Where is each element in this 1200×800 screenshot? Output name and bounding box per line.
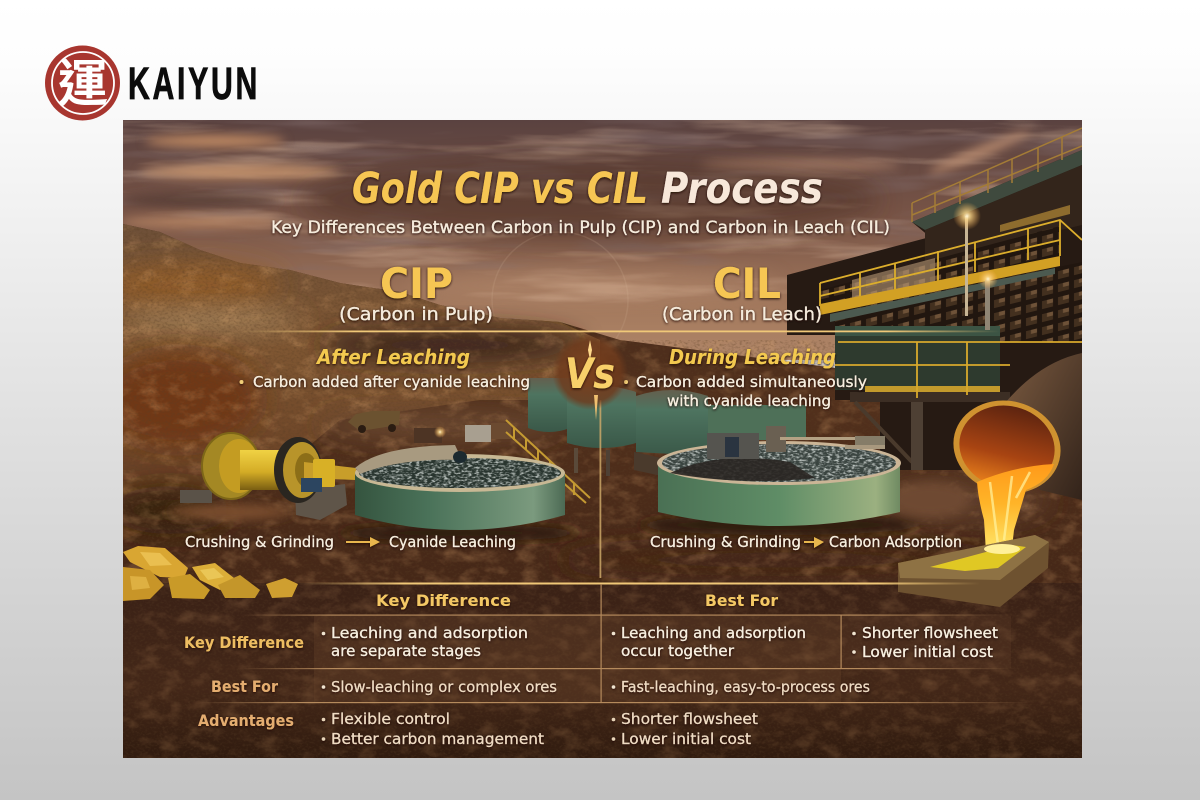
CIL column cells: occur together: [621, 642, 735, 660]
CIL process flow: [650, 533, 962, 551]
lower deck and railing: [865, 386, 1000, 392]
VS badge: [552, 334, 628, 420]
CIP process flow: Cyanide Leaching: [389, 533, 516, 551]
VS badge: Vs: [565, 349, 615, 398]
column headers: Best For: [705, 591, 778, 610]
walkway deck: [820, 256, 1060, 315]
row labels: Advantages: [198, 711, 294, 730]
upper railing: [912, 128, 1082, 222]
CIL description: with cyanide leaching: [667, 392, 831, 410]
windows: [820, 226, 1060, 308]
ladle and molten gold pour: [898, 353, 1082, 607]
tank: cyanide leaching: [355, 445, 565, 530]
ball mill: [180, 433, 356, 520]
CIP description: After Leaching: [315, 345, 470, 369]
CIL column cells: Lower initial cost: [862, 643, 993, 661]
heading: CIP: [339, 259, 493, 325]
walkway railing: [820, 220, 1082, 306]
CIP column cells: Better carbon management: [331, 730, 544, 748]
logo: Kaiyun: KAIYUN: [128, 58, 260, 109]
row labels: Best For: [211, 677, 278, 696]
CIP column cells: are separate stages: [331, 642, 481, 660]
subtitle: Key Differences Between Carbon in Pulp (CIP) and Carbon in Leach (CIL): [271, 218, 890, 238]
CIL process flow: Carbon Adsorption: [829, 533, 962, 551]
infographic image panel: [100, 120, 1082, 758]
heading: CIP: (Carbon in Pulp): [339, 304, 493, 325]
lamps: [965, 216, 968, 316]
column headers: [376, 591, 778, 610]
CIP column cells: Leaching and adsorption: [331, 624, 528, 642]
comparison table: [184, 591, 998, 748]
CIP process flow: Crushing & Grinding: [185, 533, 334, 551]
CIP column cells: Slow-leaching or complex ores: [331, 678, 557, 696]
refinery structure: [787, 128, 1082, 470]
yellow stairs: [506, 420, 590, 503]
sky with clouds: [120, 120, 1082, 368]
heading: CIP: CIP: [380, 259, 453, 308]
CIL column cells: Leaching and adsorption: [621, 624, 806, 642]
title: Process: [661, 164, 823, 214]
CIP column cells: Flexible control: [331, 710, 450, 728]
row labels: [184, 633, 304, 730]
CIP column cells: [322, 624, 557, 748]
casting mold: [898, 535, 1049, 607]
CIL column cells: Lower initial cost: [621, 730, 751, 748]
CIL process flow: Crushing & Grinding: [650, 533, 801, 551]
CIP description: [240, 345, 530, 391]
mine hillside and ground: [100, 224, 1082, 585]
background truck and buildings: [348, 411, 511, 443]
logo: Kaiyun: [45, 44, 260, 120]
column headers: Key Difference: [376, 591, 511, 610]
logo: Kaiyun: 運: [58, 44, 108, 116]
faint watermark ring: [492, 232, 628, 338]
heading: CIL: CIL: [713, 259, 781, 308]
CIL column cells: [612, 624, 998, 748]
CIP process flow: [185, 533, 516, 551]
heading: CIL: (Carbon in Leach): [662, 304, 822, 325]
title: Gold CIP vs CIL: [352, 164, 648, 214]
comparison table backing: [123, 583, 1082, 758]
CIL description: During Leaching: [669, 345, 836, 369]
heading: CIL: [662, 259, 822, 325]
CIL description: [624, 345, 867, 410]
tank machinery: [707, 426, 885, 459]
gold nuggets: [123, 546, 298, 601]
CIL column cells: Shorter flowsheet: [621, 710, 758, 728]
background green tanks: [528, 378, 806, 480]
CIL column cells: Fast-leaching, easy-to-process ores: [621, 678, 870, 696]
CIL description: Carbon added simultaneously: [636, 373, 867, 391]
dirt mounds around tanks: [170, 482, 970, 541]
CIL column cells: Shorter flowsheet: [862, 624, 998, 642]
CIP description: Carbon added after cyanide leaching: [253, 373, 530, 391]
row labels: Key Difference: [184, 633, 304, 652]
tank: carbon adsorption: [657, 426, 901, 526]
dark green tank roof: [835, 326, 1000, 336]
